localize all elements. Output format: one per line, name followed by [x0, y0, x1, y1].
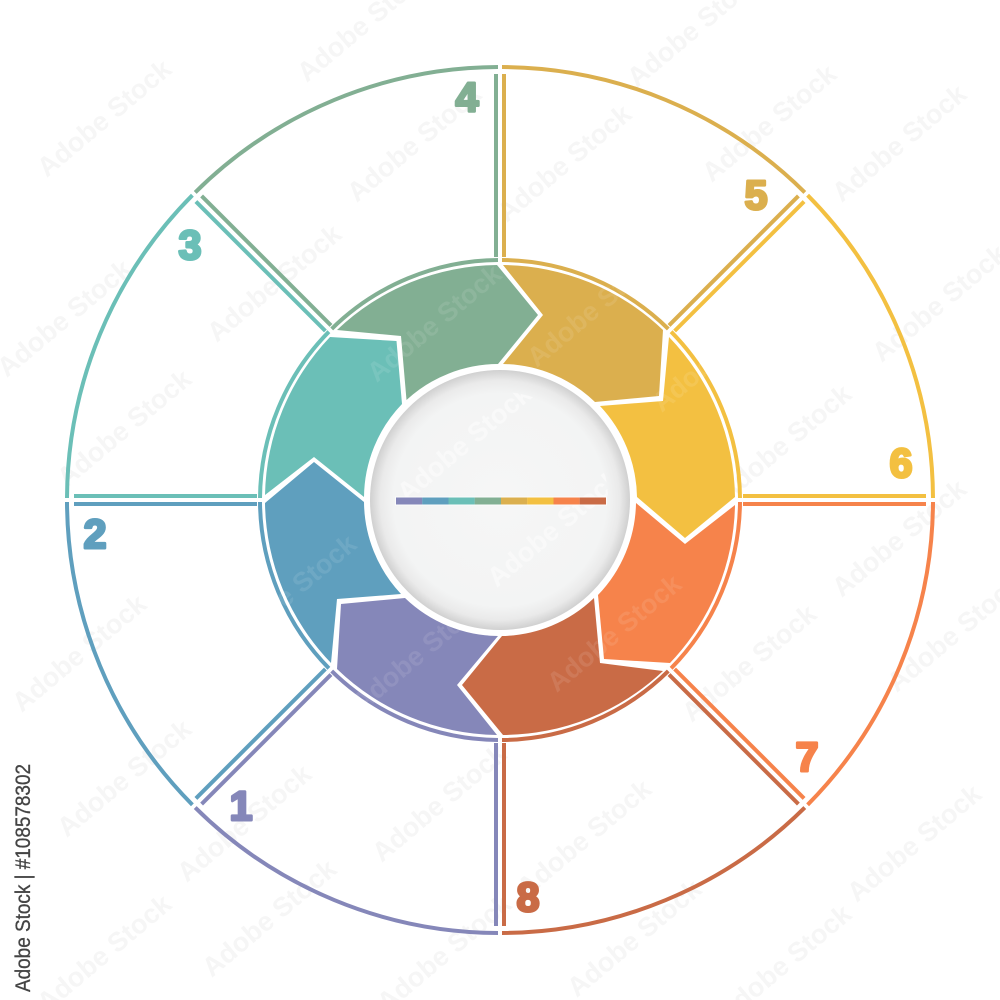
hub watermark: Adobe Stock [391, 378, 538, 508]
background watermark pattern: Adobe Stock [51, 713, 198, 843]
arrow 2 blue [265, 462, 401, 663]
background watermark pattern: Adobe Stock [561, 873, 708, 1000]
background watermark pattern: Adobe Stock [841, 778, 988, 908]
ring arc 2 [260, 502, 329, 668]
arrow watermark overlay: Adobe Stock [521, 243, 668, 373]
outer arc 8 [502, 808, 805, 933]
number 2: 2 [84, 511, 106, 557]
hub watermark [391, 378, 628, 593]
spoke left [74, 496, 257, 504]
hub white border [365, 365, 635, 635]
outer arc 1 [195, 808, 498, 933]
hub watermark: Adobe Stock [481, 463, 628, 593]
background watermark pattern: Adobe Stock [201, 218, 348, 348]
spoke bottom right [669, 669, 804, 804]
ring arc 4 [332, 260, 498, 329]
background watermark pattern: Adobe Stock [31, 53, 178, 183]
spoke top [496, 74, 504, 257]
ring arc 8 [502, 671, 668, 740]
arrow 4 green [337, 265, 538, 400]
spoke top right [669, 196, 804, 331]
background watermark pattern: Adobe Stock [711, 378, 858, 508]
ring arc 1 [332, 671, 498, 740]
background watermark pattern: Adobe Stock [6, 588, 153, 718]
number 5: 5 [745, 172, 767, 218]
spoke right [743, 496, 926, 504]
panel: spoke dividers [74, 74, 926, 926]
background watermark pattern: Adobe Stock [826, 78, 973, 208]
ring arc 6 [671, 332, 740, 498]
panel: center hub [365, 365, 635, 635]
arrow 1 purple [337, 598, 498, 735]
number 3: 3 [179, 222, 201, 268]
arrow watermark overlay: Adobe Stock [541, 568, 688, 698]
number 1: 1 [230, 783, 252, 829]
panel: step numbers [84, 74, 912, 920]
background watermark pattern: Adobe Stock [341, 78, 488, 208]
outer arc 5 [502, 67, 805, 192]
spoke bottom [496, 743, 504, 926]
arrow watermark overlay: Adobe Stock [346, 588, 493, 718]
arrow watermark overlay: Adobe Stock [361, 258, 508, 388]
panel: inner thin ring [260, 260, 740, 740]
panel: outer ring segments [67, 67, 933, 933]
background watermark pattern: Adobe Stock [366, 738, 513, 868]
background watermark pattern: Adobe Stock [826, 473, 973, 603]
background watermark pattern: Adobe Stock [491, 98, 638, 228]
arrow 3 teal [265, 337, 402, 497]
spoke bottom left [196, 669, 331, 804]
spoke top left [196, 196, 331, 331]
background watermark pattern: Adobe Stock [196, 853, 343, 983]
background watermark pattern: Adobe Stock [676, 598, 823, 728]
ring arc 3 [260, 332, 329, 498]
arrow 8 rust [462, 598, 663, 735]
outer arc 7 [808, 502, 933, 805]
arrow watermark overlay: Adobe Stock [646, 288, 793, 418]
arrow watermark overlay [216, 243, 793, 718]
background watermark pattern: Adobe Stock [171, 758, 318, 888]
arrow 6 yellow [600, 337, 735, 538]
ring arc 5 [502, 260, 668, 329]
background watermark pattern: Adobe Stock [696, 58, 843, 188]
outer arc 2 [67, 502, 192, 805]
outer arc 6 [808, 195, 933, 498]
arrow watermark overlay: Adobe Stock [216, 528, 363, 658]
hub shaded disc [370, 370, 630, 630]
arrow 5 gold [503, 265, 663, 402]
ring arc 7 [671, 502, 740, 668]
outer arc 4 [195, 67, 498, 192]
number 7: 7 [796, 734, 818, 780]
number 4: 4 [456, 74, 479, 120]
outer arc 3 [67, 195, 192, 498]
color bar [395, 496, 607, 506]
background watermark pattern: Adobe Stock [51, 363, 198, 493]
background watermark pattern: Adobe Stock [511, 773, 658, 903]
arrow 7 orange [598, 503, 735, 663]
panel: arrow wheel [265, 265, 735, 735]
number 8: 8 [517, 874, 539, 920]
number 6: 6 [890, 440, 912, 486]
stock image id caption: Adobe Stock | #108578302 [12, 764, 35, 992]
